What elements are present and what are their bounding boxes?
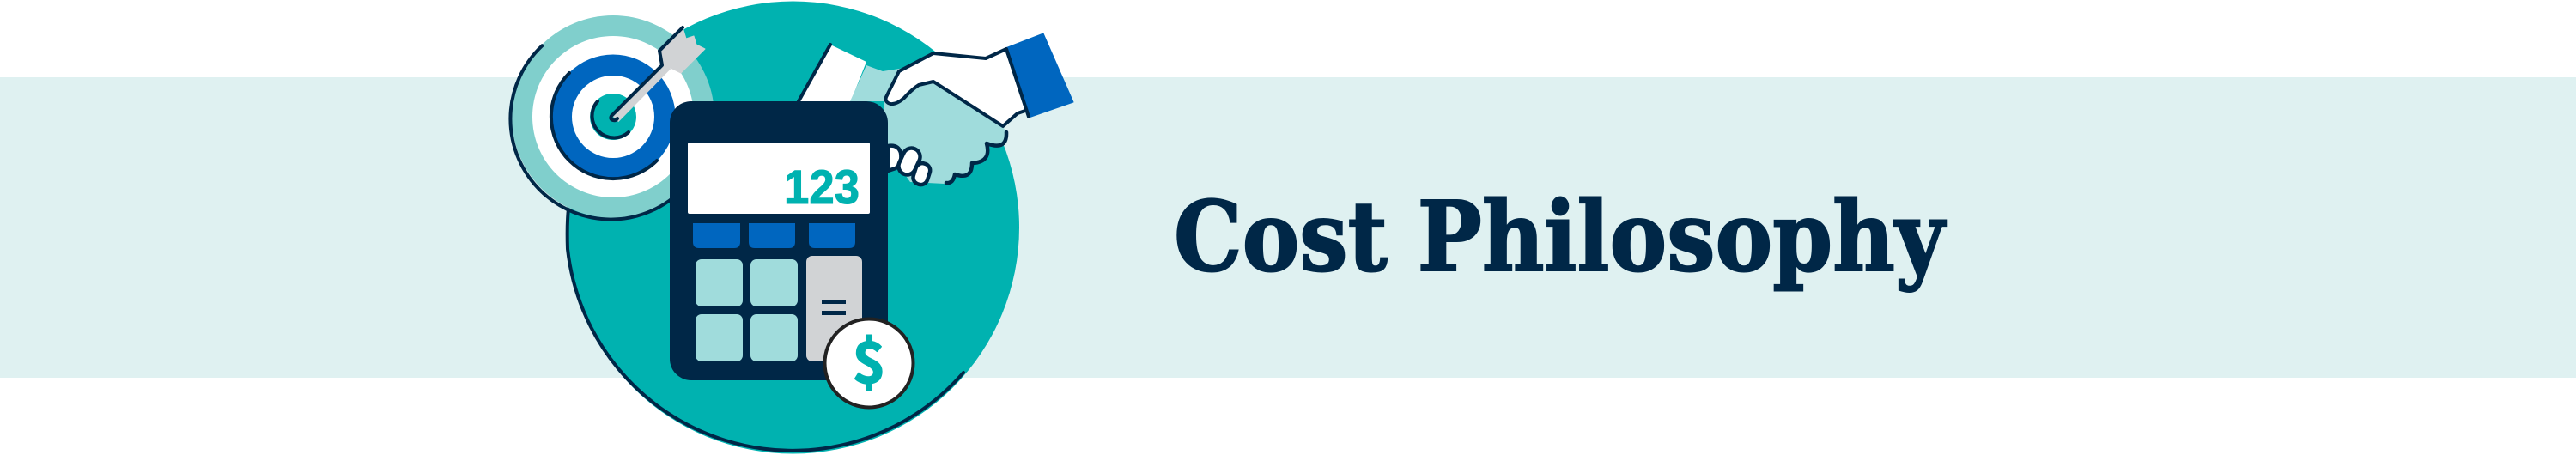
calculator body	[670, 101, 888, 380]
blue keys	[693, 223, 855, 248]
right hand	[886, 49, 1028, 126]
dart	[611, 27, 705, 120]
left hand	[850, 65, 1006, 184]
left cuff	[799, 45, 866, 103]
background band	[0, 77, 2576, 378]
icon: target with dart	[510, 15, 714, 220]
right cuff	[1005, 33, 1073, 118]
title: Cost Philosophy	[1174, 181, 1947, 294]
fist knuckle outline	[946, 132, 1006, 183]
icon: dollar coin: $	[853, 318, 885, 400]
calculator screen	[688, 143, 870, 214]
target rings	[510, 15, 714, 220]
icon: handshake	[799, 33, 1073, 186]
fingers	[888, 145, 932, 186]
icon: dollar coin	[824, 318, 914, 407]
number keys	[696, 259, 798, 361]
screen digits: 123	[784, 160, 860, 214]
icon: calculator	[670, 101, 888, 380]
left arm outline	[799, 45, 830, 101]
large teal circle	[567, 2, 1019, 453]
equals key	[806, 256, 862, 361]
